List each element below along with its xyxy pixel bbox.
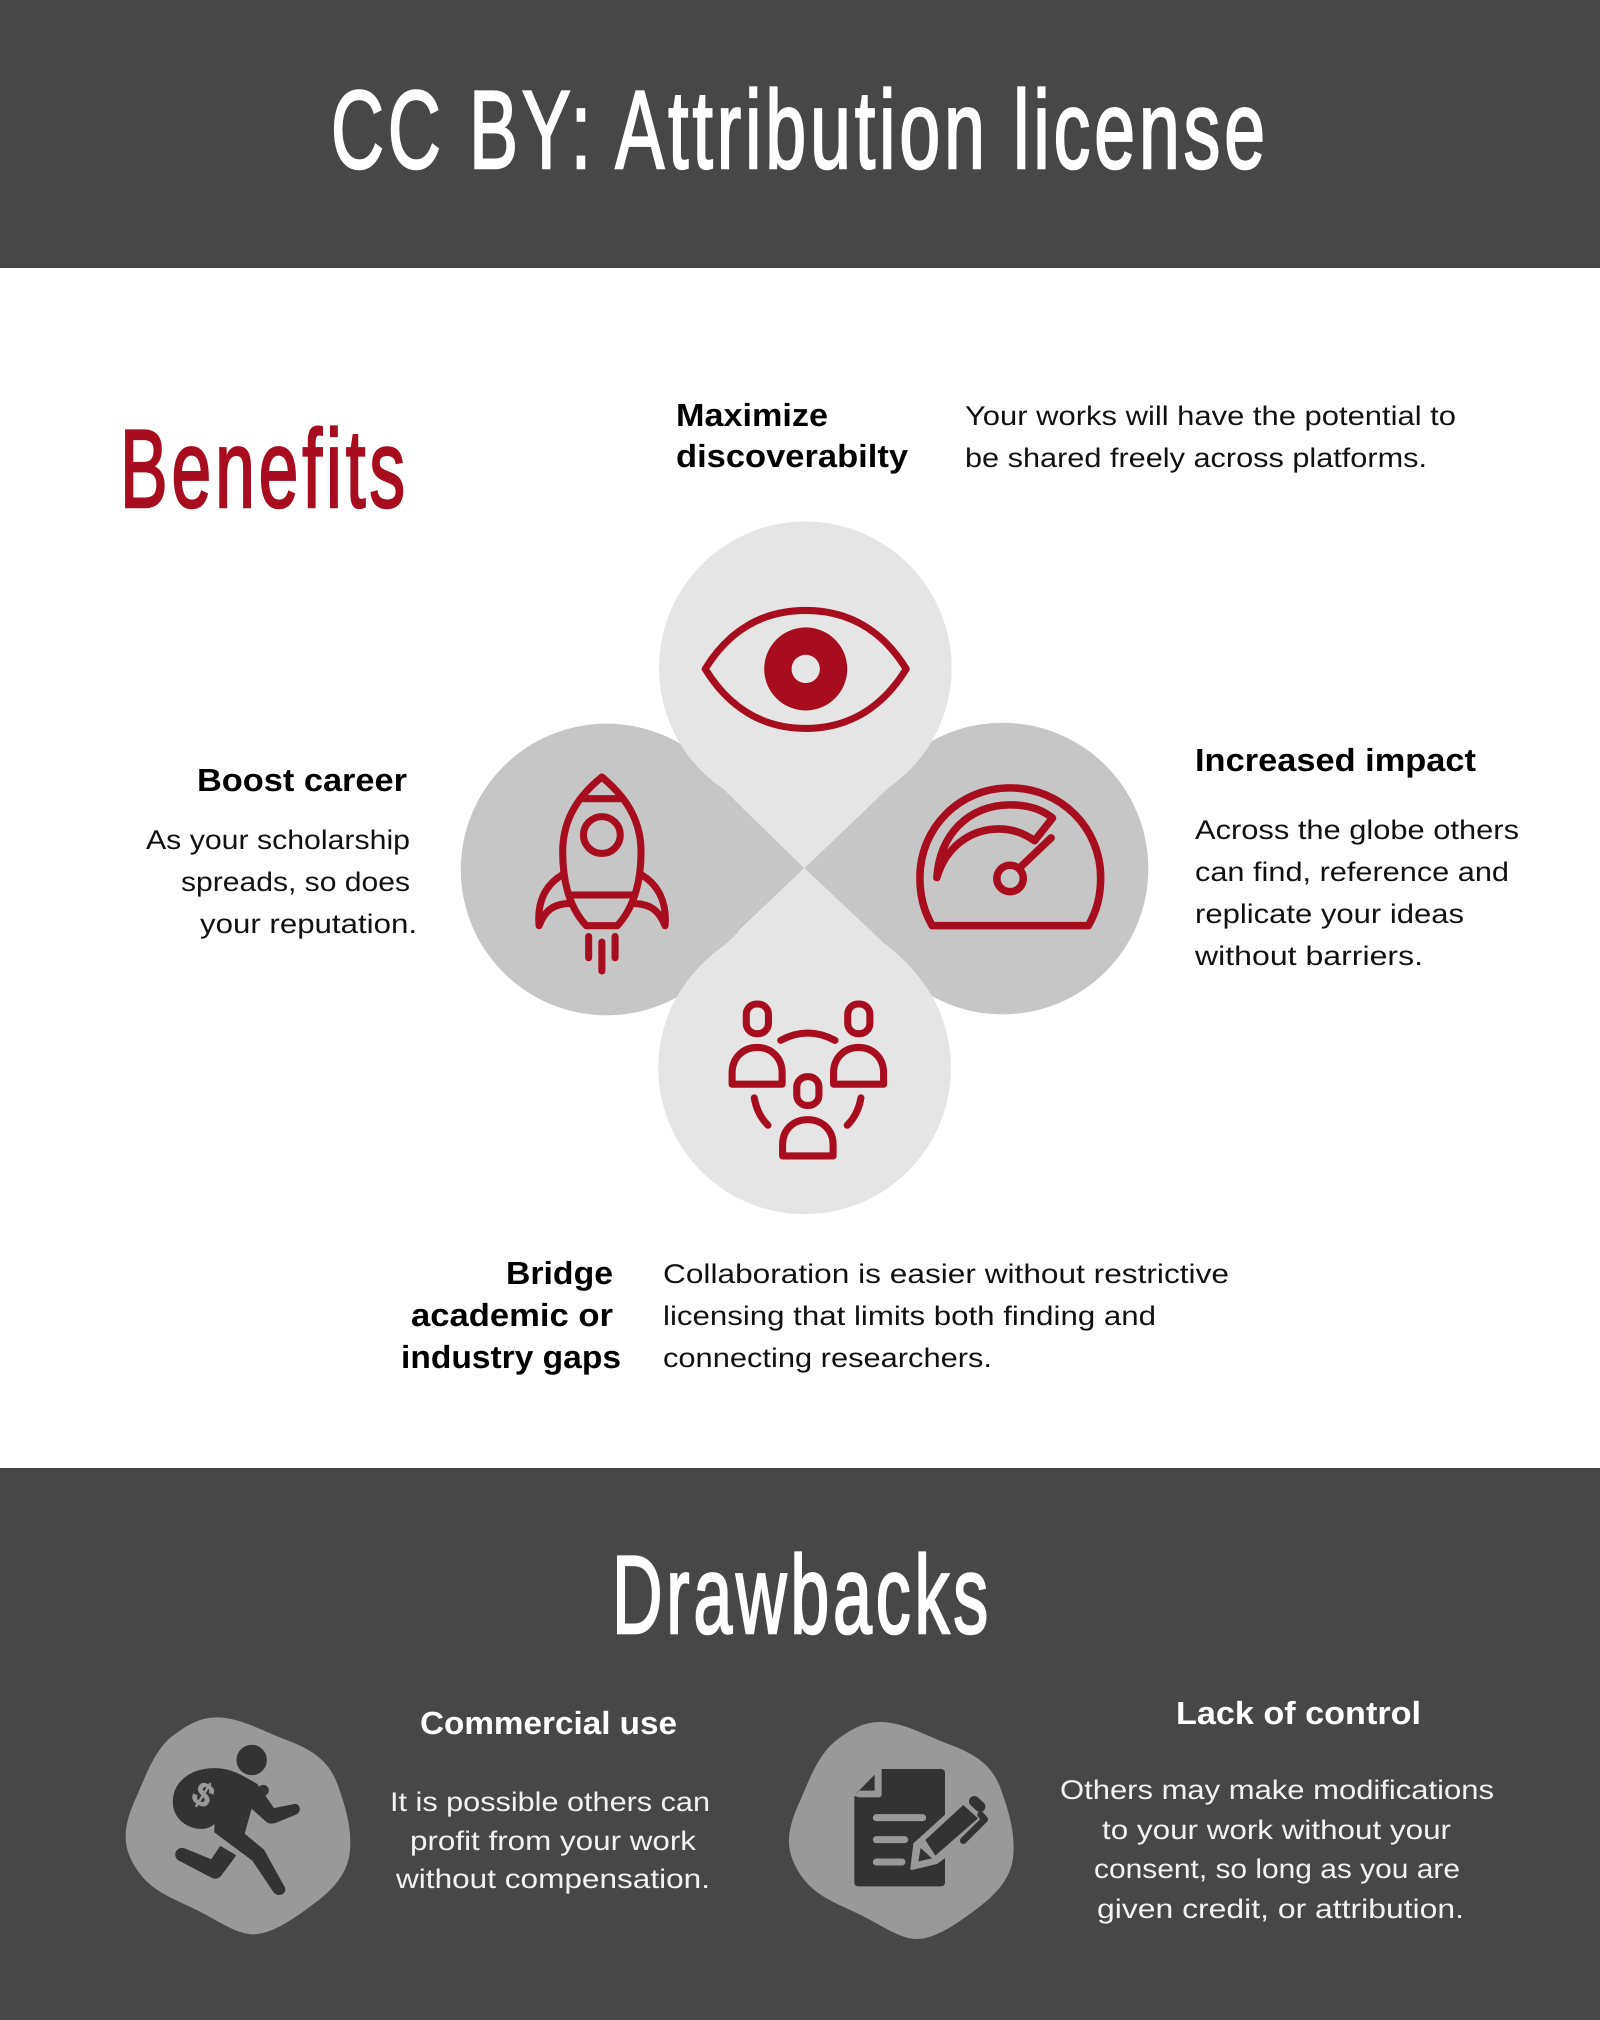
text block: Bridge academic or industry gaps: academic or <box>411 1297 613 1333</box>
text block: Maximize discoverability: be shared freely across platforms. <box>965 443 1427 473</box>
icon: speedometer gauge <box>920 788 1101 926</box>
text block: Commercial use: profit from your work <box>410 1826 697 1856</box>
text block: Boost career: spreads, so does <box>181 867 410 897</box>
petal: right <box>804 723 1148 1014</box>
text block: Maximize discoverability <box>676 397 1456 474</box>
text block: Boost career: As your scholarship <box>146 825 410 855</box>
text block: Boost career: your reputation. <box>200 909 417 939</box>
text block: Bridge academic or industry gaps: industry gaps <box>401 1339 621 1375</box>
text block: Lack of control: consent, so long as you are <box>1094 1854 1460 1884</box>
icon: eye <box>705 610 906 728</box>
panel: drawbacks band <box>0 1468 1600 2020</box>
petal: left <box>461 724 804 1015</box>
icon: thief running with money bag <box>126 1717 350 1934</box>
icon: rocket <box>539 777 665 971</box>
text block: Lack of control: Others may make modifications <box>1060 1775 1494 1805</box>
text block: Maximize discoverability: Maximize <box>676 397 828 433</box>
heading: Benefits: Benefits <box>120 407 409 531</box>
petal: bottom <box>658 868 951 1214</box>
text block: Commercial use <box>390 1705 710 1894</box>
text block: Commercial use: It is possible others can <box>390 1787 710 1817</box>
diagram: four petal clover <box>461 522 1148 1214</box>
text block: Increased impact: Increased impact <box>1195 742 1476 778</box>
text block: Lack of control: Lack of control <box>1176 1695 1421 1731</box>
icon: thief running with money bag: $ <box>185 1774 221 1815</box>
text block: Bridge academic or industry gaps: connecting researchers. <box>663 1343 992 1373</box>
text block: Boost career: Boost career <box>197 762 407 798</box>
text block: Increased impact: without barriers. <box>1194 941 1423 971</box>
heading: Drawbacks: Drawbacks <box>612 1533 992 1657</box>
text block: Lack of control <box>1060 1695 1494 1924</box>
text block: Commercial use: Commercial use <box>420 1705 677 1741</box>
text block: Increased impact <box>1194 742 1519 971</box>
text block: Maximize discoverability: discoverabilty <box>676 438 908 474</box>
petal: top <box>659 522 952 868</box>
text block: Bridge academic or industry gaps <box>401 1255 1229 1375</box>
panel: header band <box>0 0 1600 268</box>
text block: Bridge academic or industry gaps: Bridge <box>506 1255 613 1291</box>
text block: Increased impact: replicate your ideas <box>1195 899 1464 929</box>
text block: Bridge academic or industry gaps: licensing that limits both finding and <box>663 1301 1156 1331</box>
text block: Bridge academic or industry gaps: Collaboration is easier without restrictive <box>663 1259 1229 1289</box>
text block: Lack of control: to your work without your <box>1102 1815 1451 1845</box>
text block: Commercial use: without compensation. <box>395 1864 710 1894</box>
icon: connected people <box>732 1004 884 1156</box>
text block: Maximize discoverability: Your works will have the potential to <box>965 401 1456 431</box>
text block: Boost career <box>146 762 417 939</box>
text block: Increased impact: can find, reference and <box>1195 857 1509 887</box>
text block: Increased impact: Across the globe others <box>1195 815 1519 845</box>
text block: Lack of control: given credit, or attribution. <box>1097 1894 1464 1924</box>
icon: document with pen <box>789 1722 1014 1939</box>
